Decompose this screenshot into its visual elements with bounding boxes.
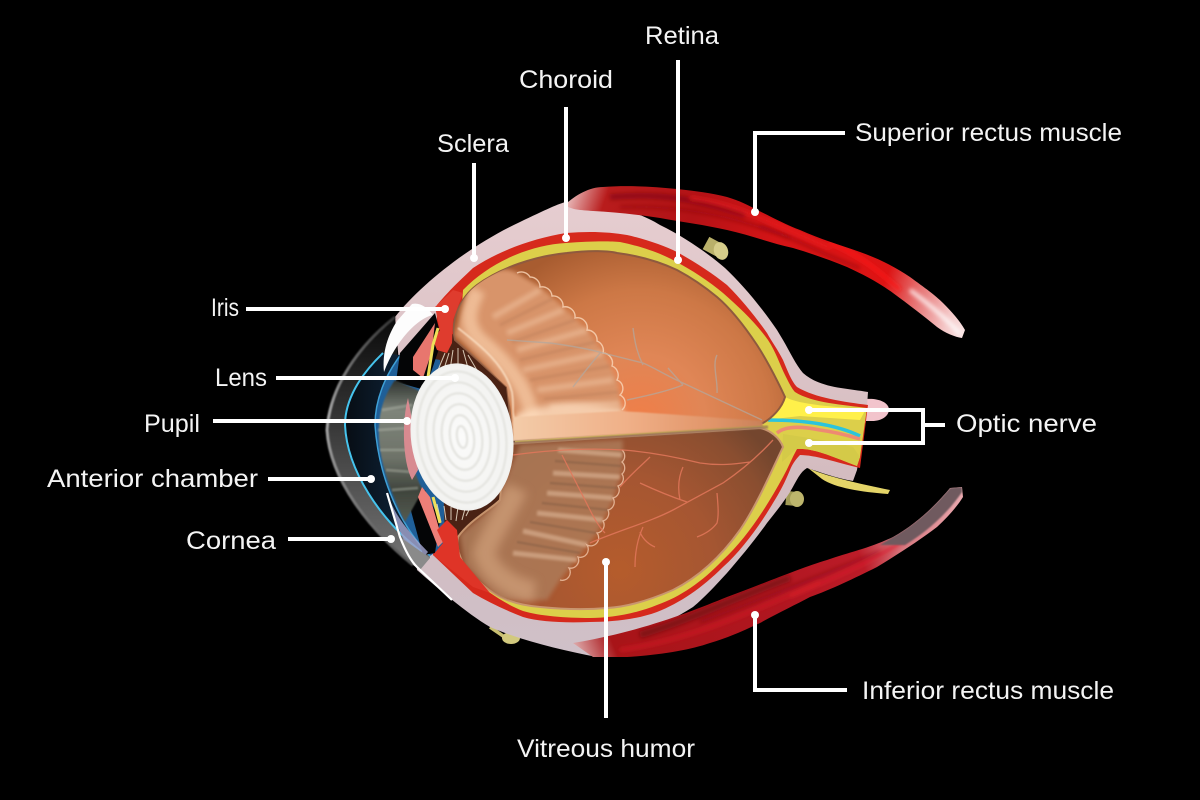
zonule fibres (436, 348, 478, 522)
dark gap between ciliary body and lens (430, 330, 520, 540)
band shadow line (513, 427, 768, 443)
label: Iris: Iris (211, 294, 239, 322)
dark wedges behind iris (396, 313, 442, 555)
central retinal vessels (768, 420, 860, 439)
vitreous lower half (457, 428, 783, 609)
lower ciliary body (433, 520, 490, 593)
label: Inferior rectus muscle: Inferior rectus muscle (862, 677, 1114, 705)
sclera (395, 202, 868, 657)
label: Sclera (437, 130, 509, 262)
label: Inferior rectus muscle (751, 611, 1114, 705)
optic nerve tail (808, 468, 890, 494)
lens (401, 357, 523, 517)
lower nerve (782, 434, 860, 466)
pupil edge tint (404, 398, 418, 480)
choroid (433, 232, 868, 622)
small tendons (490, 240, 804, 644)
cornea lower lavender (387, 493, 452, 600)
label: Pupil: Pupil (144, 410, 200, 438)
peach central band (513, 411, 763, 441)
yellow slivers by iris (428, 328, 440, 523)
label: Optic nerve (805, 406, 1097, 447)
iris root upper (413, 323, 435, 378)
inferior rectus muscle (573, 487, 963, 657)
iris fibres (378, 405, 418, 490)
lower retinal vessels (513, 440, 773, 567)
label: Choroid (519, 66, 613, 242)
label: Optic nerve: Optic nerve (956, 410, 1097, 438)
label: Vitreous humor: Vitreous humor (517, 735, 695, 763)
retina (445, 241, 867, 618)
lower ciliary folds (460, 425, 773, 600)
superior rectus muscle (568, 186, 965, 338)
upper ciliary body (433, 290, 463, 353)
anterior chamber (345, 353, 445, 556)
bright retina flare (766, 397, 866, 420)
label: Superior rectus muscle: Superior rectus muscle (855, 119, 1122, 147)
vitreous upper half (454, 251, 785, 440)
label: Iris (211, 294, 449, 322)
label: Superior rectus muscle (751, 119, 1122, 216)
iris (379, 380, 423, 522)
iris root lower (418, 487, 443, 547)
label: Lens (215, 364, 459, 392)
label: Sclera: Sclera (437, 130, 509, 158)
cornea outer shell (327, 317, 430, 565)
upper ciliary folds (455, 270, 762, 425)
label: Cornea (186, 527, 395, 555)
label: Vitreous humor (517, 558, 695, 763)
label: Lens: Lens (215, 364, 267, 392)
upper retinal vessels (507, 328, 762, 420)
nerve sheath tip (860, 399, 889, 421)
label: Anterior chamber: Anterior chamber (47, 465, 258, 493)
cornea white crescent (384, 304, 433, 372)
label: Pupil (144, 410, 411, 438)
label: Cornea: Cornea (186, 527, 276, 555)
label: Retina (645, 22, 719, 264)
label: Anterior chamber (47, 465, 375, 493)
label: Retina: Retina (645, 22, 719, 50)
label: Choroid: Choroid (519, 66, 613, 94)
